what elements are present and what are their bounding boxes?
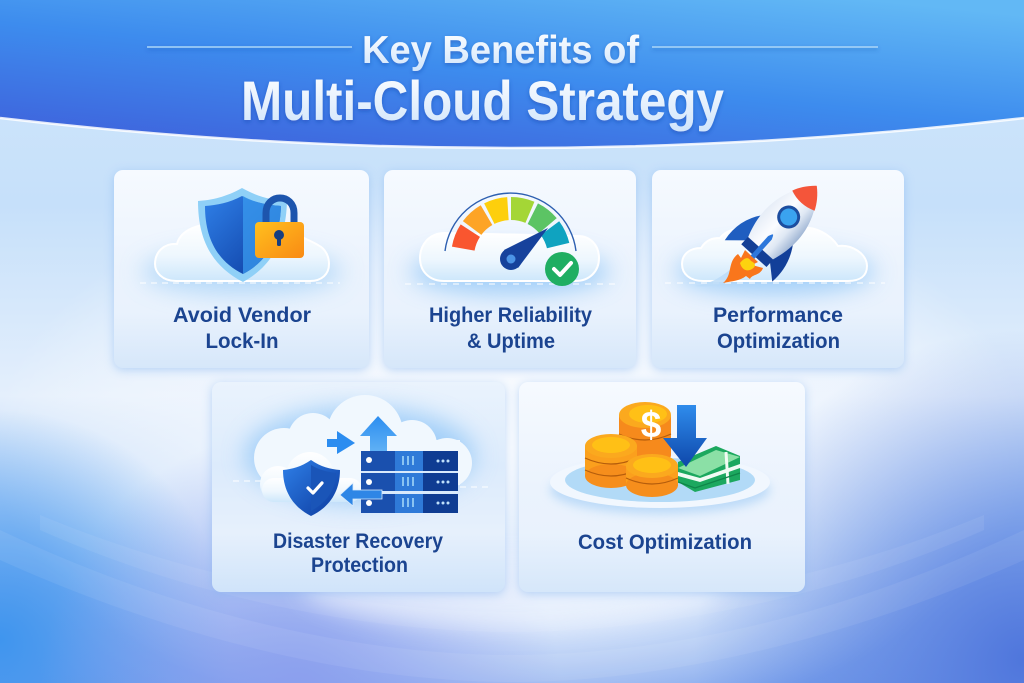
- label: [273, 530, 443, 577]
- title: [147, 29, 878, 132]
- title: Multi-Cloud Strategy: [241, 69, 724, 132]
- label: & Uptime: [467, 330, 555, 353]
- back coin stack: [619, 402, 671, 467]
- icon: rocket on cloud: [682, 164, 867, 286]
- label: [713, 304, 843, 353]
- label: Protection: [311, 554, 408, 577]
- icon: gauge on cloud with check: [420, 189, 599, 325]
- panel: higher reliability and uptime: [384, 170, 636, 370]
- icon: coins, cash and down arrow: [550, 402, 770, 514]
- panel: performance optimization: [652, 164, 904, 370]
- label: Disaster Recovery: [273, 530, 443, 553]
- icon: clouds, shield, servers and arrows: [254, 395, 472, 516]
- label: Optimization: [717, 330, 840, 353]
- label: Avoid Vendor: [173, 304, 311, 327]
- cash stack: [678, 446, 740, 492]
- label: [429, 304, 592, 353]
- title: Key Benefits of: [362, 29, 640, 72]
- panel: avoid vendor lock-in: [114, 170, 369, 370]
- panel: disaster recovery protection: [212, 382, 505, 594]
- label: [173, 304, 311, 353]
- icon: cloud with shield and lock: [155, 188, 329, 282]
- label: Performance: [713, 304, 843, 327]
- label: Lock-In: [206, 330, 278, 353]
- label: Cost Optimization: [578, 531, 752, 554]
- page background: [0, 189, 1024, 683]
- left coin stack: [585, 434, 637, 488]
- front coin stack: [626, 454, 678, 497]
- label: Higher Reliability: [429, 304, 592, 327]
- back coin stack: $: [641, 404, 662, 445]
- header band: [0, 0, 1024, 148]
- panel: cost optimization: [519, 382, 805, 594]
